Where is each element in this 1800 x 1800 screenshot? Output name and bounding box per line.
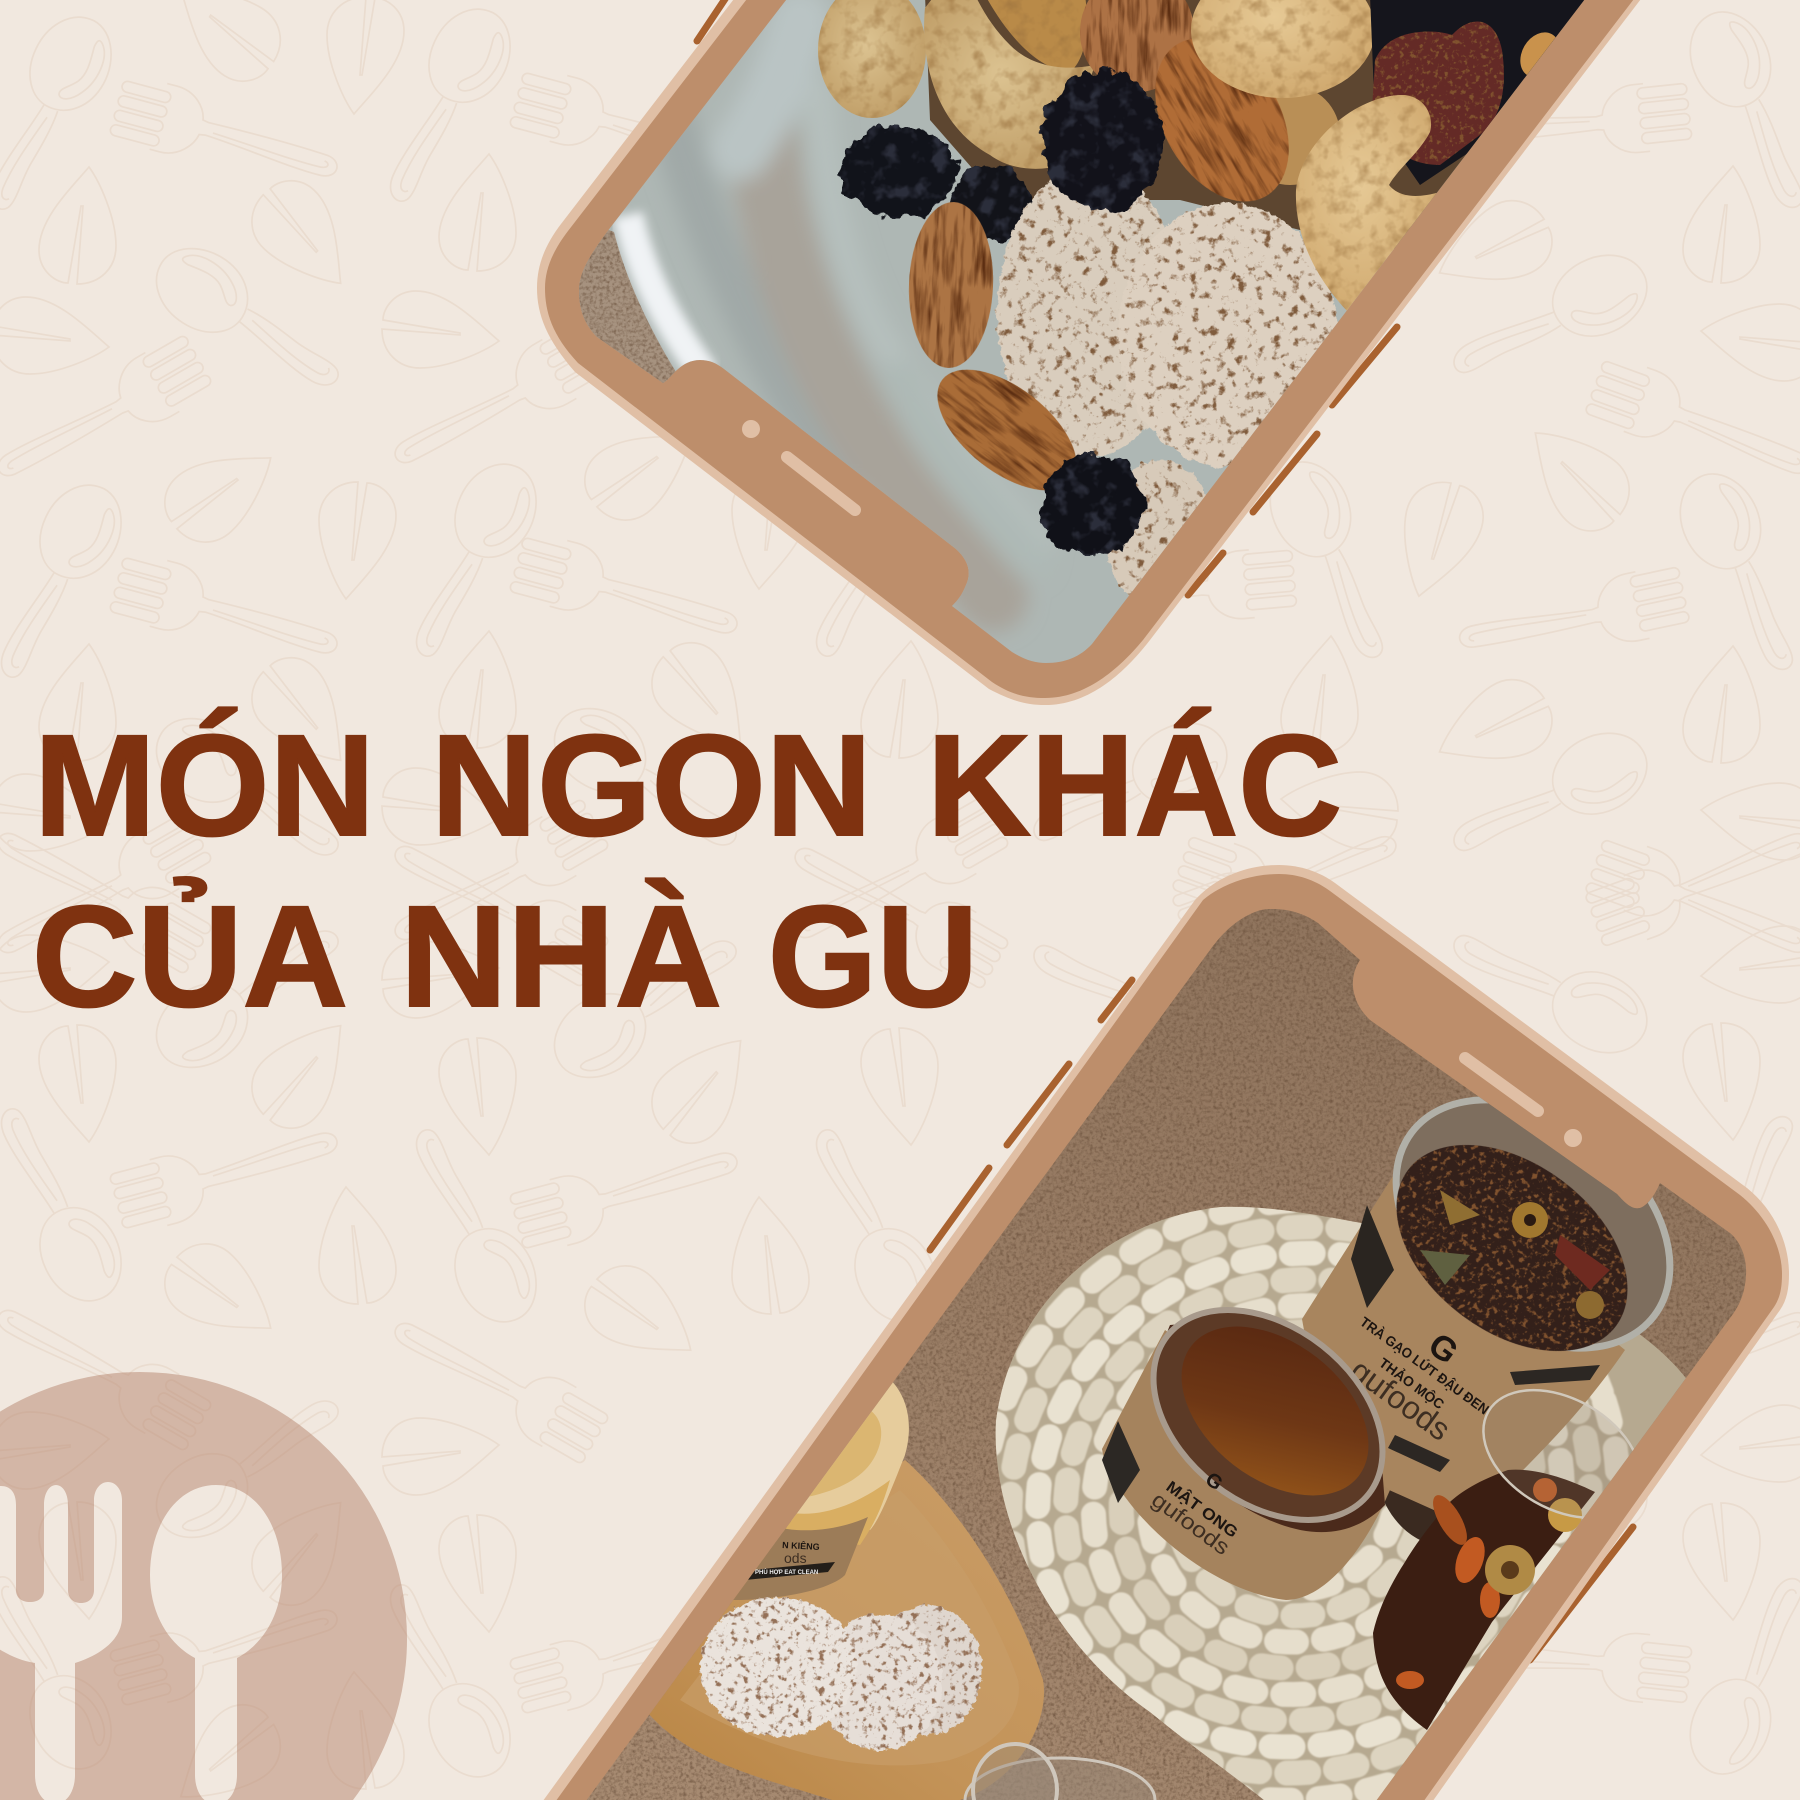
rim bbox=[1348, 1049, 1718, 1399]
jar body bbox=[1102, 1330, 1390, 1600]
butter bbox=[810, 1412, 882, 1496]
phone body bbox=[553, 874, 1782, 1800]
jar body bbox=[1302, 1165, 1625, 1525]
small cashew bbox=[1520, 32, 1556, 75]
rice cake right bbox=[1118, 203, 1338, 467]
phone: top with nuts photo bbox=[537, 0, 1644, 715]
dark cashew behind bbox=[985, 0, 1087, 72]
rice cake front bbox=[700, 1597, 856, 1737]
cork surface bbox=[579, 230, 676, 383]
phone side buttons bbox=[930, 980, 1633, 1660]
tray inner bbox=[680, 1586, 1010, 1766]
label text: N KIÊNG bbox=[782, 1539, 820, 1552]
dried fruit slice bbox=[1485, 1545, 1535, 1595]
photo: nuts and rice cakes bbox=[579, 0, 1584, 663]
jar: nut butter diet: ods bbox=[784, 1550, 807, 1566]
title: NGON bbox=[431, 705, 872, 866]
raisin left bbox=[840, 126, 956, 218]
title: MÓN bbox=[34, 705, 375, 866]
glass jar with brewed tea bbox=[1373, 1364, 1663, 1730]
plate highlight bbox=[628, 215, 705, 375]
speaker slot bbox=[787, 457, 855, 510]
logo G: G bbox=[1201, 1468, 1227, 1495]
glass rim bbox=[1461, 1364, 1663, 1544]
phone: bottom with gufoods photo bbox=[540, 865, 1800, 1800]
honey jar bbox=[1102, 1267, 1423, 1600]
jar: nut butter diet: PHÙ HỢP EAT CLEAN bbox=[755, 1569, 818, 1576]
phone outer edge bbox=[540, 865, 1789, 1800]
jar: nut butter diet bbox=[733, 1375, 909, 1600]
title: NHÀ bbox=[400, 876, 722, 1037]
cranberry bbox=[1372, 21, 1504, 165]
black strip bbox=[745, 1562, 835, 1580]
jar label bbox=[733, 1517, 868, 1600]
black side panel bbox=[1351, 1205, 1394, 1308]
jar rim bbox=[792, 1382, 909, 1530]
tea jar: THẢO MỘC bbox=[1376, 1354, 1448, 1412]
woven mat bbox=[996, 1206, 1686, 1800]
almond centre bbox=[1155, 39, 1289, 202]
cashew large right bbox=[1296, 95, 1440, 316]
glass collar bbox=[1162, 1320, 1385, 1532]
icon: fork and spoon in circle bbox=[0, 1372, 407, 1800]
speaker slot bbox=[1465, 1058, 1538, 1111]
logo G: G bbox=[1421, 1326, 1465, 1372]
tea jar bbox=[1302, 1049, 1718, 1540]
phone side buttons bbox=[697, 0, 1397, 595]
raisin under bbox=[952, 165, 1032, 245]
empty glass jar at bottom bbox=[965, 1744, 1155, 1800]
almond top bbox=[1080, 0, 1194, 92]
phone body bbox=[545, 0, 1637, 698]
tea contents bbox=[1358, 1103, 1666, 1393]
camera dot bbox=[1564, 1129, 1582, 1147]
wooden tray bbox=[647, 1460, 1044, 1800]
dried fruit slices bbox=[1420, 1190, 1610, 1319]
glass rim bbox=[1113, 1267, 1423, 1563]
title: CỦA bbox=[32, 875, 348, 1037]
cashew curved bbox=[924, 0, 1095, 169]
tea body bbox=[1373, 1470, 1595, 1730]
backing shadow between nuts bbox=[925, 0, 1590, 250]
rice cake back bbox=[872, 1605, 982, 1735]
goji berries bbox=[1396, 1478, 1557, 1689]
raisin big bbox=[1042, 68, 1162, 212]
raisin lower bbox=[1040, 453, 1144, 557]
label strips bbox=[1388, 1365, 1600, 1472]
dark raisin mass bbox=[1370, 0, 1590, 185]
kraft surface bbox=[560, 880, 1800, 1800]
phone outer edge bbox=[537, 0, 1644, 705]
rice cake left bbox=[994, 180, 1164, 457]
dark jar base bbox=[1378, 1485, 1470, 1540]
honey jar: gufoods bbox=[1147, 1487, 1235, 1560]
plate shading bbox=[672, 20, 1039, 597]
tan nut behind cashew bbox=[1276, 93, 1338, 185]
almond bottom bbox=[937, 369, 1076, 490]
tea jar: gufoods bbox=[1344, 1352, 1457, 1448]
cashew top right bbox=[1191, 0, 1375, 98]
black panel bbox=[1102, 1421, 1140, 1503]
camera dot bbox=[742, 420, 760, 438]
cashew left bbox=[818, 0, 926, 118]
honey bbox=[1150, 1292, 1400, 1530]
photo: gufoods jars on woven mat bbox=[560, 880, 1800, 1800]
rice cake middle bbox=[818, 1614, 942, 1750]
label title: MẬT ONG bbox=[1163, 1477, 1242, 1542]
title: KHÁC bbox=[927, 705, 1342, 866]
label title: TRÀ GẠO LỨT ĐẬU ĐEN bbox=[1357, 1313, 1493, 1418]
almond left bbox=[906, 201, 996, 369]
title: GU bbox=[768, 876, 978, 1037]
rice cake bottom bbox=[1106, 459, 1206, 596]
title bbox=[32, 705, 1342, 1037]
